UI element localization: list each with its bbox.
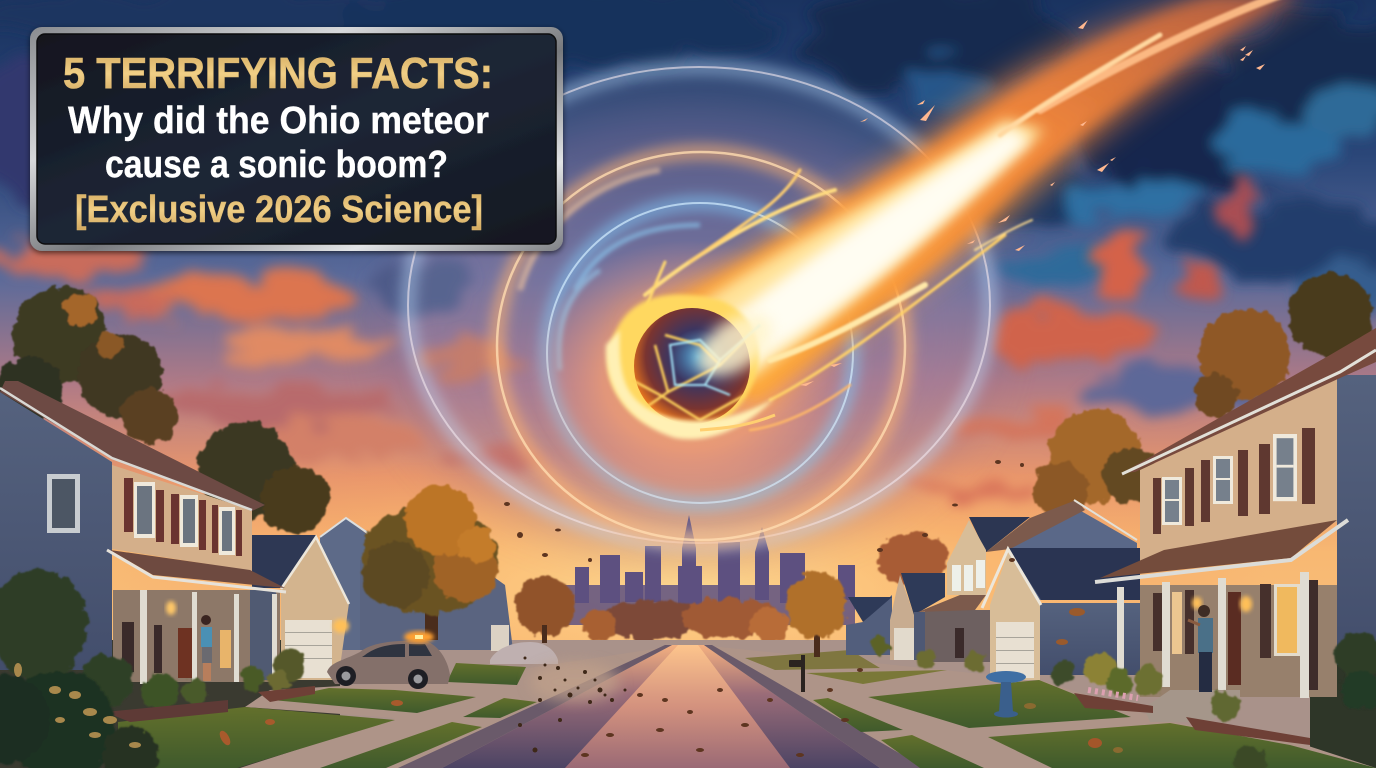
tree: right street (787, 571, 847, 657)
mailbox (789, 655, 805, 692)
tree: right back (1032, 409, 1158, 518)
car with hazard light (327, 631, 450, 689)
outer ring (408, 67, 990, 543)
plaque panel (37, 34, 556, 244)
foreground foliage (0, 570, 1265, 768)
road (442, 645, 880, 768)
ground (0, 640, 1376, 768)
heading line 2: Why did the Ohio meteor (68, 100, 489, 142)
person right (1188, 605, 1213, 692)
tree: back left (197, 422, 329, 534)
city skyline (565, 515, 855, 625)
distant tree line (515, 532, 948, 642)
tree: left street (542, 625, 547, 643)
shockwave rings (408, 67, 990, 543)
main left house (0, 381, 286, 684)
sunset clouds left (0, 244, 540, 469)
middle ring (497, 152, 905, 540)
trees (0, 273, 1372, 534)
bird bath (986, 671, 1026, 718)
inner ring (547, 203, 853, 503)
heading line 4: [Exclusive 2026 Science] (75, 189, 483, 231)
heading line 1: 5 TERRIFYING FACTS: (63, 49, 493, 98)
meteor tail (625, 0, 1320, 430)
back house (320, 518, 513, 651)
right middle houses (846, 500, 1140, 680)
meteor glow (530, 240, 850, 510)
heading line 3: cause a sonic boom? (105, 144, 448, 186)
dust cloud (518, 656, 626, 752)
flame streaks (640, 0, 1280, 430)
main right house (1095, 328, 1376, 722)
right lawns (745, 650, 1376, 768)
person left (201, 615, 212, 681)
tree: central orange (362, 485, 498, 640)
left lawns (118, 663, 537, 768)
bushes right (871, 631, 1376, 745)
porch section (918, 595, 990, 662)
garage house right (982, 548, 1140, 680)
plaque frame (30, 27, 563, 251)
garage house (252, 535, 349, 680)
small house (890, 573, 945, 660)
far small house (846, 595, 892, 655)
tree: far right (1193, 273, 1372, 417)
sparks (800, 20, 1265, 386)
tree: far left (0, 287, 178, 443)
flying leaves (218, 460, 1123, 757)
meteor rock (606, 294, 783, 439)
upper gable house (947, 500, 1137, 600)
street trees (542, 571, 847, 657)
left houses (0, 381, 513, 722)
dark storm clouds (0, 0, 1376, 320)
shrubs left (81, 649, 305, 710)
distant car (490, 642, 558, 664)
title plaque (30, 27, 563, 251)
sunset clouds right (905, 177, 1270, 499)
heading text (63, 49, 493, 231)
